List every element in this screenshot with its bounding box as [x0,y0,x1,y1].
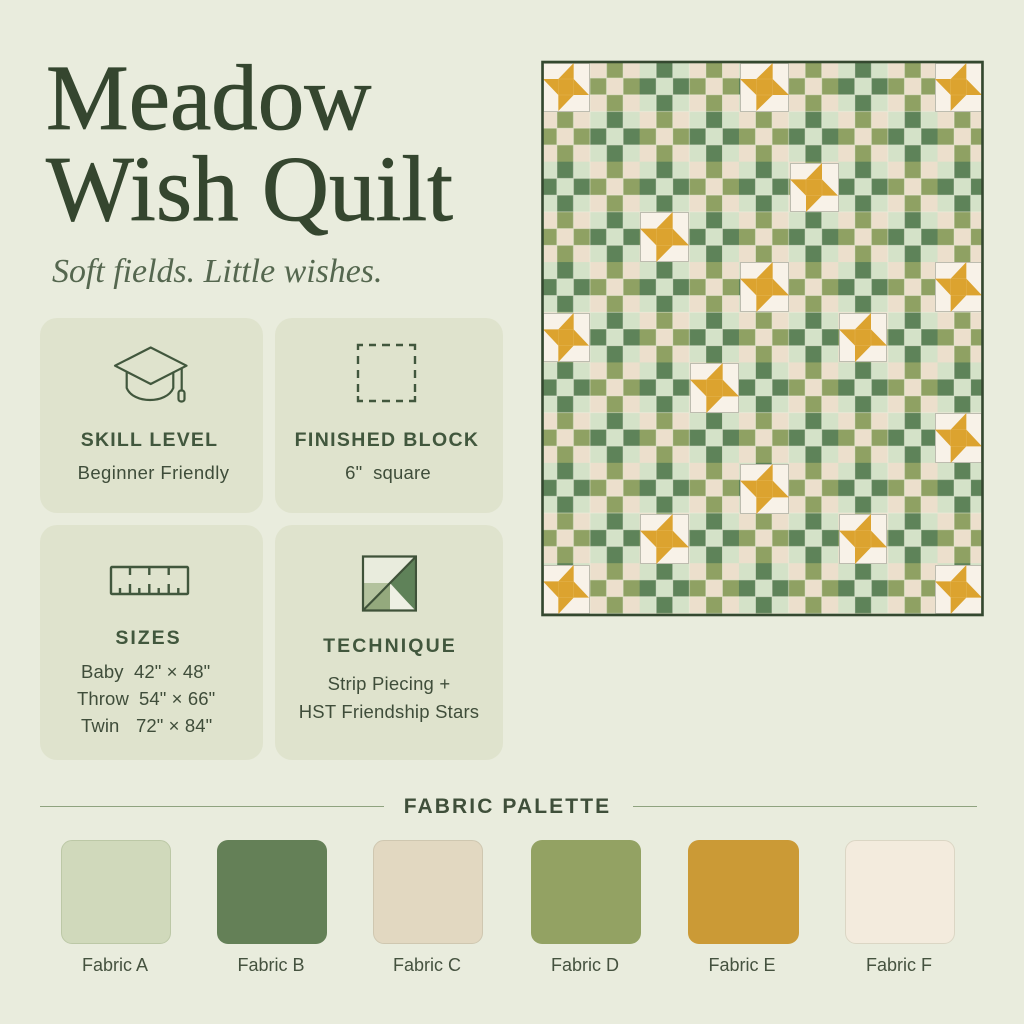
text: six inch square: 6" square [345,462,431,483]
text: size list [77,661,215,736]
panel: sizes [40,525,263,760]
icon: half square triangle [362,555,417,612]
quilt illustration [541,60,984,616]
text: size list: Throw [77,688,129,709]
palette heading right rule [633,806,977,807]
swatch: fabric A [61,840,171,944]
swatch label: fabric F: Fabric F [866,955,932,975]
friendship stars [543,63,982,614]
text: size list: 42" × 48" [134,661,210,682]
heading: technique: TECHNIQUE [323,635,457,657]
swatch: fabric B [217,840,327,944]
tagline: Soft fields. Little wishes. [52,253,382,290]
heading: fabric palette: FABRIC PALETTE [404,795,611,818]
panel: finished block [275,318,503,513]
swatch label: fabric E: Fabric E [708,955,776,975]
icon: dashed square [356,344,416,402]
swatch label: fabric C: Fabric C [393,955,461,975]
text: beginner friendly: Beginner Friendly [78,462,229,483]
swatch: fabric F [845,840,955,944]
panel: skill level [40,318,263,513]
quilt border [542,62,982,615]
swatch label: fabric D: Fabric D [551,955,619,975]
text: size list: Twin [81,715,119,736]
title: Meadow Wish Quilt [46,47,453,241]
panel: technique [275,525,503,760]
icon: graduation cap [114,346,188,403]
swatch: fabric E [688,840,799,944]
swatch label: fabric B: Fabric B [237,955,305,975]
swatch label: fabric A: Fabric A [82,955,148,975]
palette heading left rule [40,806,384,807]
text: size list: Baby [81,661,124,682]
icon: ruler [110,566,190,596]
swatch: fabric D [531,840,641,944]
swatch: fabric C [373,840,483,944]
heading: finished block: FINISHED BLOCK [295,429,479,451]
heading: skill level: SKILL LEVEL [81,429,218,451]
quilt patchwork [543,62,982,614]
heading: sizes: SIZES [115,627,182,649]
text: size list: 72" × 84" [136,715,212,736]
text: size list: 54" × 66" [139,688,215,709]
text: technique description: Strip Piecing + HST Friendship Stars [299,673,479,722]
